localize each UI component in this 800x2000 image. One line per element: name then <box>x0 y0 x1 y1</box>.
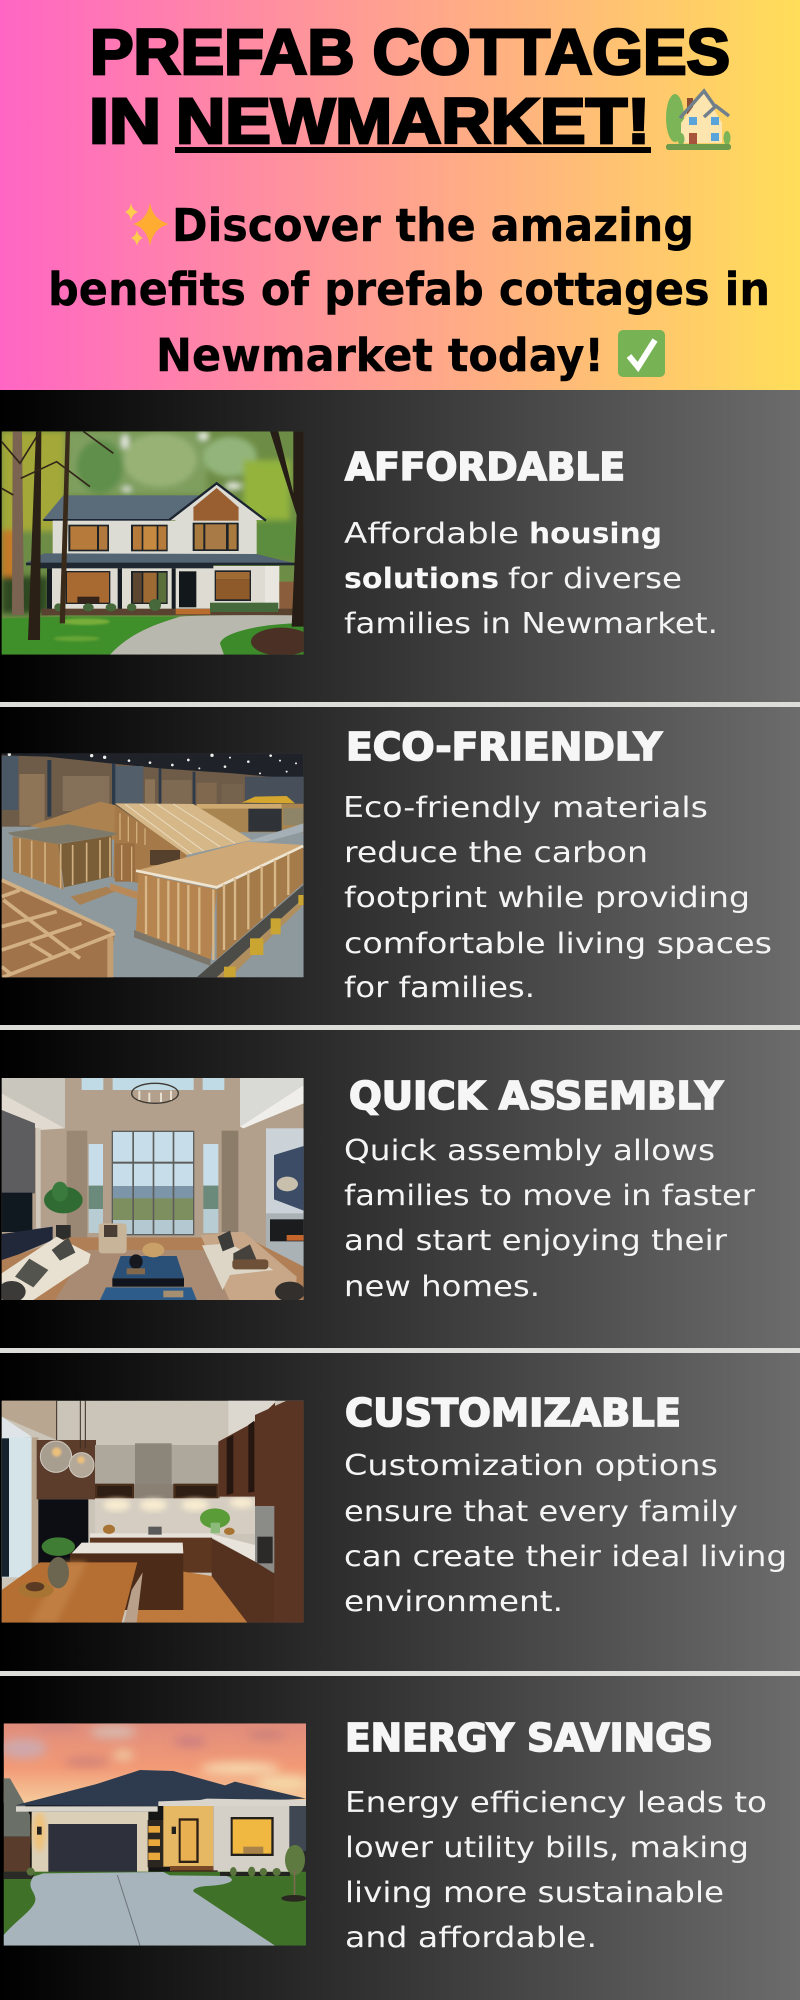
description: and affordable. <box>345 1921 597 1954</box>
lawns <box>4 1872 306 1946</box>
neighbours <box>4 1778 30 1837</box>
description: for diverse <box>508 562 682 595</box>
description: lower utility bills, making <box>345 1831 749 1864</box>
description: Eco-friendly materials <box>343 791 708 824</box>
steps <box>170 1866 213 1871</box>
description: reduce the carbon <box>344 836 648 869</box>
heading: AFFORDABLE <box>345 445 625 490</box>
right sofa <box>201 1232 297 1300</box>
description <box>344 1134 755 1303</box>
heading: ECO-FRIENDLY <box>346 725 663 770</box>
description: solutions <box>344 562 499 595</box>
subtitle: Newmarket today! <box>156 329 604 382</box>
left sofa <box>2 1237 91 1300</box>
floor and rug <box>2 1237 304 1300</box>
photo: two-storey house in the woods <box>2 431 312 656</box>
photo: bungalow at sunset <box>0 1723 310 1946</box>
photo: living room with tall windows <box>0 1078 305 1302</box>
photo: walnut kitchen <box>2 1401 304 1623</box>
description: ensure that every family <box>344 1495 738 1528</box>
panel: affordable <box>0 390 800 702</box>
subtitle <box>48 199 770 382</box>
roof <box>15 1770 306 1806</box>
front module <box>136 842 303 888</box>
description: living more sustainable <box>345 1876 724 1909</box>
description: footprint while providing <box>344 881 750 914</box>
decor <box>200 1508 230 1528</box>
photo: timber frames in a factory <box>2 753 304 977</box>
title <box>89 16 730 157</box>
porch <box>52 566 278 609</box>
floor <box>127 1572 247 1623</box>
description <box>344 517 718 640</box>
middle house <box>30 802 115 840</box>
title: IN <box>89 85 161 157</box>
curtains <box>67 1131 87 1238</box>
pendants <box>57 1401 85 1448</box>
heading: ENERGY SAVINGS <box>345 1716 713 1761</box>
heading: QUICK ASSEMBLY <box>349 1074 724 1119</box>
description: comfortable living spaces <box>344 927 772 960</box>
subtitle: benefits of prefab cottages in <box>48 263 770 316</box>
large window <box>112 1131 194 1235</box>
title: PREFAB COTTAGES <box>90 16 730 88</box>
left pavilion <box>7 824 118 844</box>
driveway <box>4 1872 275 1946</box>
armchair <box>99 1223 127 1253</box>
panel: quick assembly <box>0 1030 800 1348</box>
left wall <box>2 1110 35 1193</box>
description: families to move in faster <box>344 1179 755 1212</box>
description: Quick assembly allows <box>344 1134 715 1167</box>
description: environment. <box>344 1585 563 1618</box>
description: and start enjoying their <box>344 1224 727 1257</box>
right wall <box>266 1128 304 1218</box>
island <box>70 1553 183 1610</box>
trees <box>12 431 24 615</box>
description <box>344 1449 787 1618</box>
right cabinets <box>218 1403 275 1497</box>
description <box>343 791 772 1004</box>
heading: CUSTOMIZABLE <box>345 1391 681 1436</box>
panel: customizable <box>0 1353 800 1671</box>
description: can create their ideal living <box>344 1540 787 1573</box>
fascia <box>16 1806 158 1812</box>
panel: energy savings <box>0 1676 800 2000</box>
table <box>2 1562 137 1623</box>
description: Affordable <box>344 517 519 550</box>
walls <box>32 1812 148 1872</box>
roof <box>43 495 200 520</box>
header banner <box>0 0 800 390</box>
icon: check mark <box>618 330 665 377</box>
icon: sparkles <box>125 203 169 246</box>
shrubs <box>285 1845 305 1875</box>
lawn and drive <box>2 617 180 655</box>
coffee tables <box>112 1256 184 1278</box>
description: families in Newmarket. <box>344 607 718 640</box>
icon: house with trees <box>666 91 731 150</box>
description: new homes. <box>344 1270 540 1303</box>
description: Energy efficiency leads to <box>345 1786 767 1819</box>
description <box>345 1786 767 1954</box>
back module <box>197 804 303 832</box>
description: Customization options <box>344 1449 718 1482</box>
panel: eco-friendly <box>0 707 800 1025</box>
bottom-left frame <box>2 878 115 977</box>
title: NEWMARKET! <box>176 85 650 157</box>
description: for families. <box>344 971 535 1004</box>
subtitle: Discover the amazing <box>172 199 694 252</box>
description: housing <box>529 517 662 550</box>
